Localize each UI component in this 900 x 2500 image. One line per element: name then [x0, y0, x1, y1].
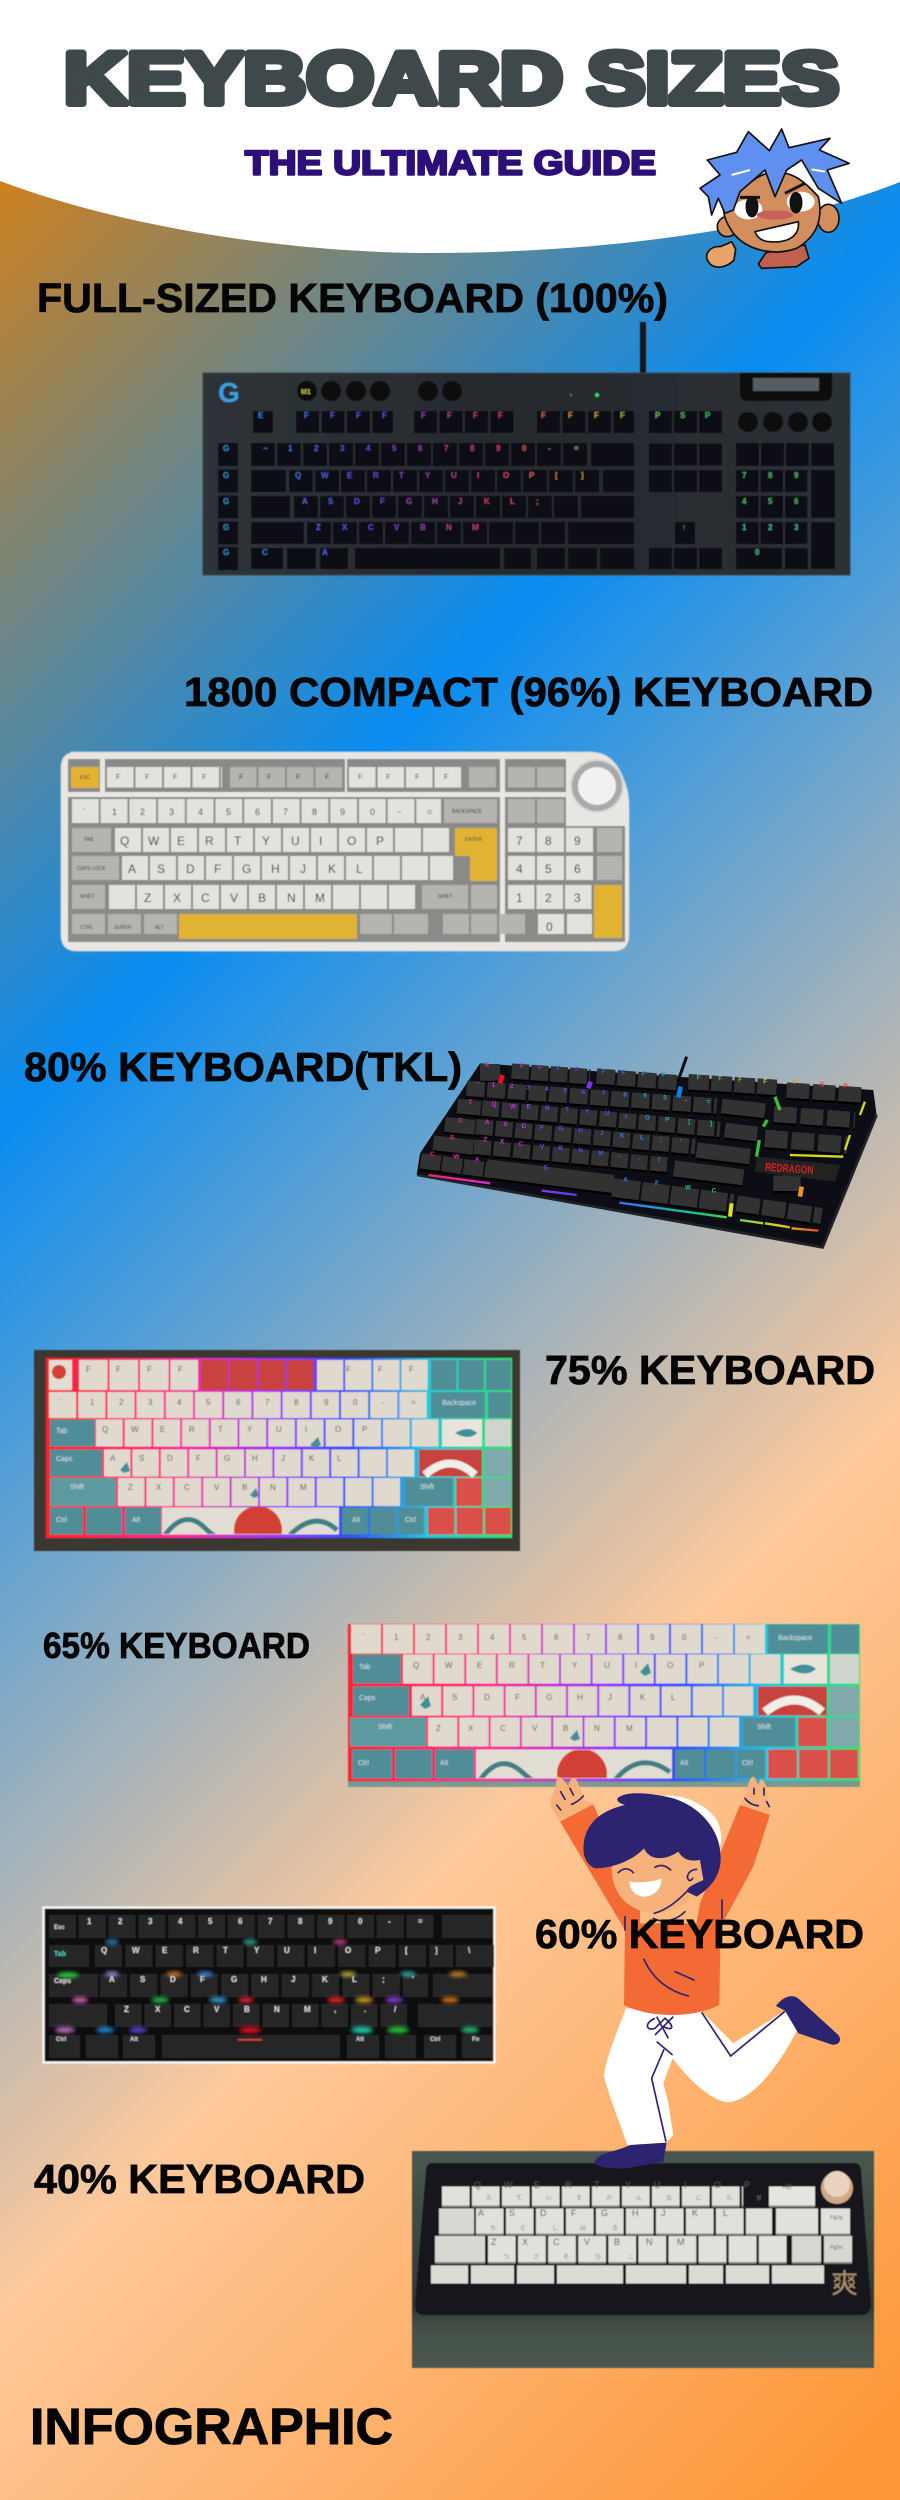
keyboard: 65% with rainbow lighting: Ctrl: [358, 1760, 369, 1767]
keyboard: 40% white on black case: +削: [782, 2183, 792, 2191]
keyboard: 60% black RGB: 1234567890-=: [87, 1917, 423, 1926]
icon: blue-haired mascot with thumbs up: [700, 129, 849, 268]
keyboard: 75% with rainbow lighting: Alt: [352, 1517, 360, 1524]
keyboard: 80% tenkeyless: REDRAGON: [765, 1162, 814, 1177]
heading: 1800 compact keyboard: 1800 COMPACT (96%) KEYBOARD: [184, 669, 873, 715]
keyboard: 1800 compact 96%: 123: [516, 891, 581, 905]
keyboard: 40% white on black case: たていすかんなにらせ: [486, 2195, 762, 2202]
keyboard: 1800 compact 96%: `1234567890-=: [82, 807, 432, 817]
subtitle: THE ULTIMATE GUIDE: [245, 144, 656, 182]
keyboard: 75% with rainbow lighting: QWERTYUIOP: [102, 1425, 367, 1434]
keyboard: 65% with rainbow lighting: `1234567890-=: [362, 1633, 751, 1642]
keyboard: 1800 compact 96%: FFFFFFFFFFFF: [116, 774, 448, 781]
keyboard: 75% with rainbow lighting: `1234567890-=: [60, 1398, 416, 1407]
boy: white cap: [663, 1796, 721, 1847]
boy: shoes: [595, 1996, 840, 2168]
keyboard: 75% with rainbow lighting: Shift: [420, 1484, 434, 1491]
keyboard: 1800 compact 96%: ESC: [80, 775, 91, 781]
keyboard: 40% white on black case: QWERTYUIOP: [474, 2180, 750, 2190]
keyboard: 65% with rainbow lighting: ASDFGHJKL: [420, 1693, 676, 1702]
keyboard: 80% tenkeyless: CWASAFWC: [430, 1151, 717, 1195]
keyboard: 60% black RGB: Esc: [54, 1925, 65, 1931]
boy: face: [612, 1847, 703, 1913]
keyboard: 40% white on black case: PgUp: [830, 2215, 843, 2221]
keyboard: 40% white on black case: ASDFGHJKL: [478, 2208, 728, 2218]
keyboard: full-sized 100%: GZXCVBNM: [223, 523, 479, 532]
keyboard: 65% with rainbow lighting: Backspace: [778, 1635, 812, 1642]
keyboard: 75% with rainbow lighting: Ctrl: [405, 1517, 416, 1524]
keyboard: 1800 compact 96%: [61, 752, 629, 951]
keyboard: 1800 compact 96%: ASDFGHJKL: [128, 862, 363, 876]
boy: pants seams: [647, 2011, 785, 2142]
keyboard: 40% white on black case: [412, 2151, 874, 2368]
illustration: jumping boy holding keyboard: [550, 1776, 840, 2168]
keyboard: 75% with rainbow lighting: Ctrl: [56, 1517, 67, 1524]
keyboard: 40% white on black case: つさそひこ: [503, 2254, 634, 2261]
boy: pants: [604, 2008, 797, 2147]
keyboard: 80% tenkeyless: EFFFFFFFFFFFFPSP: [485, 1062, 848, 1090]
boy: smile: [629, 1878, 662, 1897]
keyboard: full-sized 100%: GASDFGHJKL;: [223, 497, 539, 506]
footer label: infographic: INFOGRAPHIC: [30, 2398, 393, 2455]
keyboard: full-sized 100%: EFFFFFFFFFFFFPSP: [258, 411, 711, 420]
keyboard: 1800 compact 96%: 0: [546, 920, 553, 934]
keyboard: 65% with rainbow lighting: ZXCVBNM: [436, 1724, 633, 1733]
keyboard: 75% with rainbow lighting: FFFFFFF: [86, 1365, 414, 1374]
keyboard: 65% with rainbow lighting: Ctrl: [742, 1760, 753, 1767]
keyboard: full-sized 100%: 789: [742, 471, 799, 480]
heading: 80% keyboard: 80% KEYBOARD(TKL): [24, 1044, 462, 1090]
keyboard: 60% black RGB: Fn: [472, 2037, 480, 2043]
keyboard: 80% tenkeyless: CASDFGHJKL;': [458, 1117, 682, 1145]
keyboard: 80% tenkeyless: SZXCVBNM,./: [450, 1134, 660, 1164]
keyboard: 75% with rainbow lighting: Tab: [56, 1428, 67, 1435]
keyboard: 60% black RGB: ASDFGHJKL;': [109, 1975, 414, 1984]
keyboard: full-sized 100%: 123: [742, 523, 799, 532]
keyboard: 60% black RGB: QWERTYUIOP[]\: [101, 1946, 471, 1955]
keyboard: 65% with rainbow lighting: Shift: [757, 1724, 771, 1731]
keyboard: 65% with rainbow lighting: Alt: [680, 1760, 688, 1767]
keyboard: 75% with rainbow lighting: ZXCVBNM: [128, 1483, 307, 1492]
keyboard: 60% black RGB: Ctrl: [430, 2037, 441, 2043]
keyboard: full-sized 100%: M1: [301, 389, 311, 396]
boy: hair: [583, 1793, 721, 1897]
keyboard: 1800 compact 96%: QWERTYUIOP: [120, 834, 384, 848]
keyboard: 40% white on black case: ZXCVBNM: [491, 2237, 684, 2247]
keyboard: 65% with rainbow lighting: Caps: [359, 1695, 376, 1702]
boy: line details: [557, 1788, 769, 1996]
keyboard: 40% white on black case: PgDn: [830, 2245, 843, 2251]
keyboard: full-sized 100%: G: [218, 377, 240, 408]
keyboard: 65% with rainbow lighting: Alt: [440, 1760, 448, 1767]
keyboard: 60% black RGB: Ctrl: [56, 2037, 67, 2043]
title: KEYBOARD SIZES: [64, 38, 839, 120]
keyboard: 80% tenkeyless: [417, 1057, 877, 1248]
keyboard: 40% white on black case: 爽: [831, 2269, 858, 2299]
keyboard: 75% with rainbow lighting: Backspace: [442, 1400, 476, 1407]
keyboard: 60% black RGB: [44, 1908, 494, 2062]
keyboard: 40% white on black case: ちとしはき: [490, 2225, 618, 2232]
keyboard: 75% with rainbow lighting: ASDFGHJKL: [110, 1454, 342, 1463]
keyboard: full-sized 100%: GCA: [223, 548, 328, 557]
keyboard: 75% with rainbow lighting: Shift: [70, 1484, 84, 1491]
keyboard: 1800 compact 96%: TAB: [84, 837, 94, 843]
keyboard: full-sized 100%: 456: [742, 497, 799, 506]
keyboard: 80% tenkeyless: TQWERTYUIOP[]: [468, 1099, 712, 1127]
keyboard: 60% black RGB: Caps: [54, 1978, 71, 1985]
keyboard: 75% with rainbow lighting: [34, 1350, 520, 1554]
keyboard: 1800 compact 96%: CAPS LOCK: [77, 866, 106, 872]
keyboard: full-sized 100%: G~1234567890-=: [223, 444, 579, 453]
keyboard: 60% black RGB: Tab: [54, 1951, 66, 1958]
heading: full-sized keyboard: FULL-SIZED KEYBOARD (100%): [37, 275, 668, 321]
keyboard: 1800 compact 96%: ZXCVBNM: [144, 891, 325, 905]
white curved header panel: [0, 0, 900, 253]
heading: 75% keyboard: 75% KEYBOARD: [545, 1347, 875, 1393]
heading: 60% keyboard: 60% KEYBOARD: [535, 1911, 864, 1957]
keyboard: 1800 compact 96%: ENTER: [465, 837, 482, 843]
boy: shirt and arms: [560, 1804, 770, 2015]
keyboard: 1800 compact 96%: ALT: [155, 925, 164, 931]
keyboard: 65% with rainbow lighting: QWERTYUIOP: [413, 1661, 704, 1670]
keyboard: 80% tenkeyless: ~1234567890-=: [477, 1080, 711, 1105]
keyboard: 1800 compact 96%: SHIFT: [438, 894, 452, 900]
keyboard: 1800 compact 96%: BACKSPACE: [452, 809, 483, 815]
keyboard: 1800 compact 96%: SHIFT: [80, 894, 94, 900]
keyboard: 65% with rainbow lighting: Shift: [378, 1724, 392, 1731]
keyboard: 1800 compact 96%: CTRL: [80, 925, 93, 931]
keyboard: 60% black RGB: Alt: [356, 2037, 364, 2043]
keyboard: full-sized 100%: [203, 322, 850, 575]
keyboard: 65% with rainbow lighting: [348, 1624, 860, 1799]
keyboard: full-sized 100%: ↑: [682, 523, 686, 532]
keyboard: 65% with rainbow lighting: Tab: [359, 1664, 370, 1671]
keyboard: full-sized 100%: 0: [755, 548, 760, 557]
keyboard: 60% black RGB: Alt: [130, 2037, 138, 2043]
boy: hands: [550, 1776, 771, 1822]
keyboard: 75% with rainbow lighting: Caps: [56, 1456, 73, 1463]
heading: 65% keyboard: 65% KEYBOARD: [43, 1625, 310, 1666]
keyboard: 1800 compact 96%: 789: [516, 834, 581, 848]
keyboard: 1800 compact 96%: 456: [516, 862, 581, 876]
keyboard: full-sized 100%: GQWERTYUIOP[]: [223, 471, 584, 480]
keyboard: 60% black RGB: ZXCVBNM,./: [124, 2005, 397, 2014]
keyboard: 1800 compact 96%: SUPER: [114, 925, 132, 931]
keyboard: 75% with rainbow lighting: Alt: [132, 1517, 140, 1524]
heading: 40% keyboard: 40% KEYBOARD: [34, 2156, 365, 2202]
